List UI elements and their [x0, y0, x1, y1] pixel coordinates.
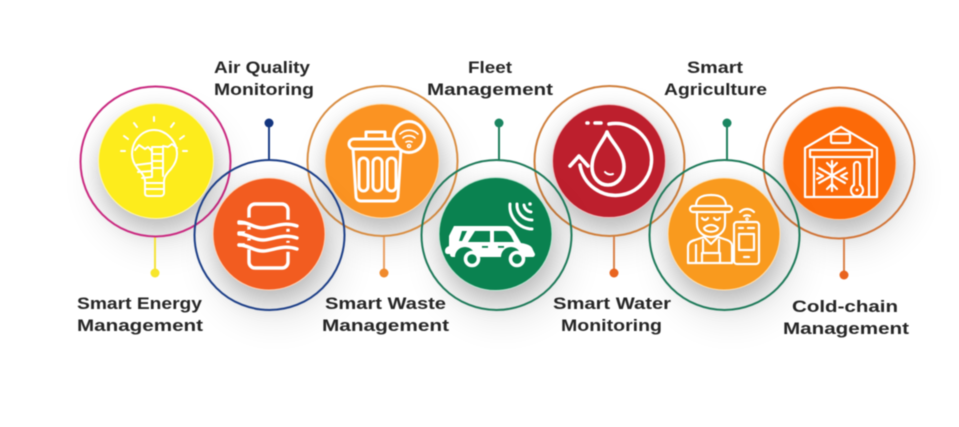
- label: Management: [427, 80, 553, 99]
- label: [783, 297, 909, 338]
- label: Agriculture: [664, 80, 767, 99]
- outer ring: [764, 88, 914, 238]
- connector stem: [150, 237, 160, 278]
- label: Air Quality: [214, 58, 311, 77]
- panel: Fleet Management: [422, 58, 573, 324]
- label: [77, 294, 203, 335]
- label: Smart Energy: [77, 294, 203, 313]
- outer ring: [534, 86, 684, 236]
- connector stem: [380, 236, 388, 278]
- filled disc: [668, 178, 780, 290]
- panel: Smart Energy Management: [77, 86, 232, 335]
- connector stem: [840, 239, 848, 280]
- label: [427, 58, 553, 99]
- label: Management: [77, 316, 203, 335]
- filled disc: [783, 106, 896, 220]
- icon: cold storage barn: [805, 127, 877, 197]
- label: Management: [322, 316, 449, 335]
- label: Monitoring: [561, 316, 662, 335]
- panel: Cold-chain Management: [764, 88, 916, 338]
- outer ring: [422, 160, 572, 310]
- outer ring: [80, 86, 230, 236]
- filled disc: [325, 104, 439, 218]
- icon: water cycle: [570, 123, 652, 195]
- label: Monitoring: [214, 80, 314, 99]
- panel: Air Quality Monitoring: [194, 58, 346, 324]
- label: [553, 294, 671, 335]
- outer ring: [308, 86, 458, 236]
- label: [322, 294, 449, 335]
- filled disc: [552, 104, 666, 218]
- connector stem: [494, 118, 504, 160]
- panel: Smart Agriculture: [650, 58, 801, 324]
- connector stem: [264, 118, 274, 160]
- label: [214, 58, 314, 99]
- icon: bin with wifi: [349, 122, 424, 201]
- label: Smart: [687, 58, 743, 77]
- outer ring: [650, 160, 800, 310]
- icon: farmer with device: [688, 195, 759, 264]
- label: Management: [783, 319, 909, 338]
- label: [664, 58, 767, 99]
- filled disc: [439, 178, 552, 290]
- icon: connected car: [445, 202, 535, 266]
- label: Fleet: [468, 58, 512, 77]
- icon: light bulb: [121, 117, 187, 196]
- filled disc: [213, 178, 325, 290]
- filled disc: [98, 104, 214, 218]
- label: Smart Water: [553, 294, 671, 313]
- label: Cold-chain: [792, 297, 898, 316]
- icon: air quality device: [239, 204, 297, 268]
- connector stem: [610, 236, 618, 278]
- outer ring: [194, 160, 344, 310]
- connector stem: [722, 118, 732, 160]
- label: Smart Waste: [325, 294, 446, 313]
- panel: Smart Water Monitoring: [534, 86, 686, 335]
- panel: Smart Waste Management: [308, 86, 459, 335]
